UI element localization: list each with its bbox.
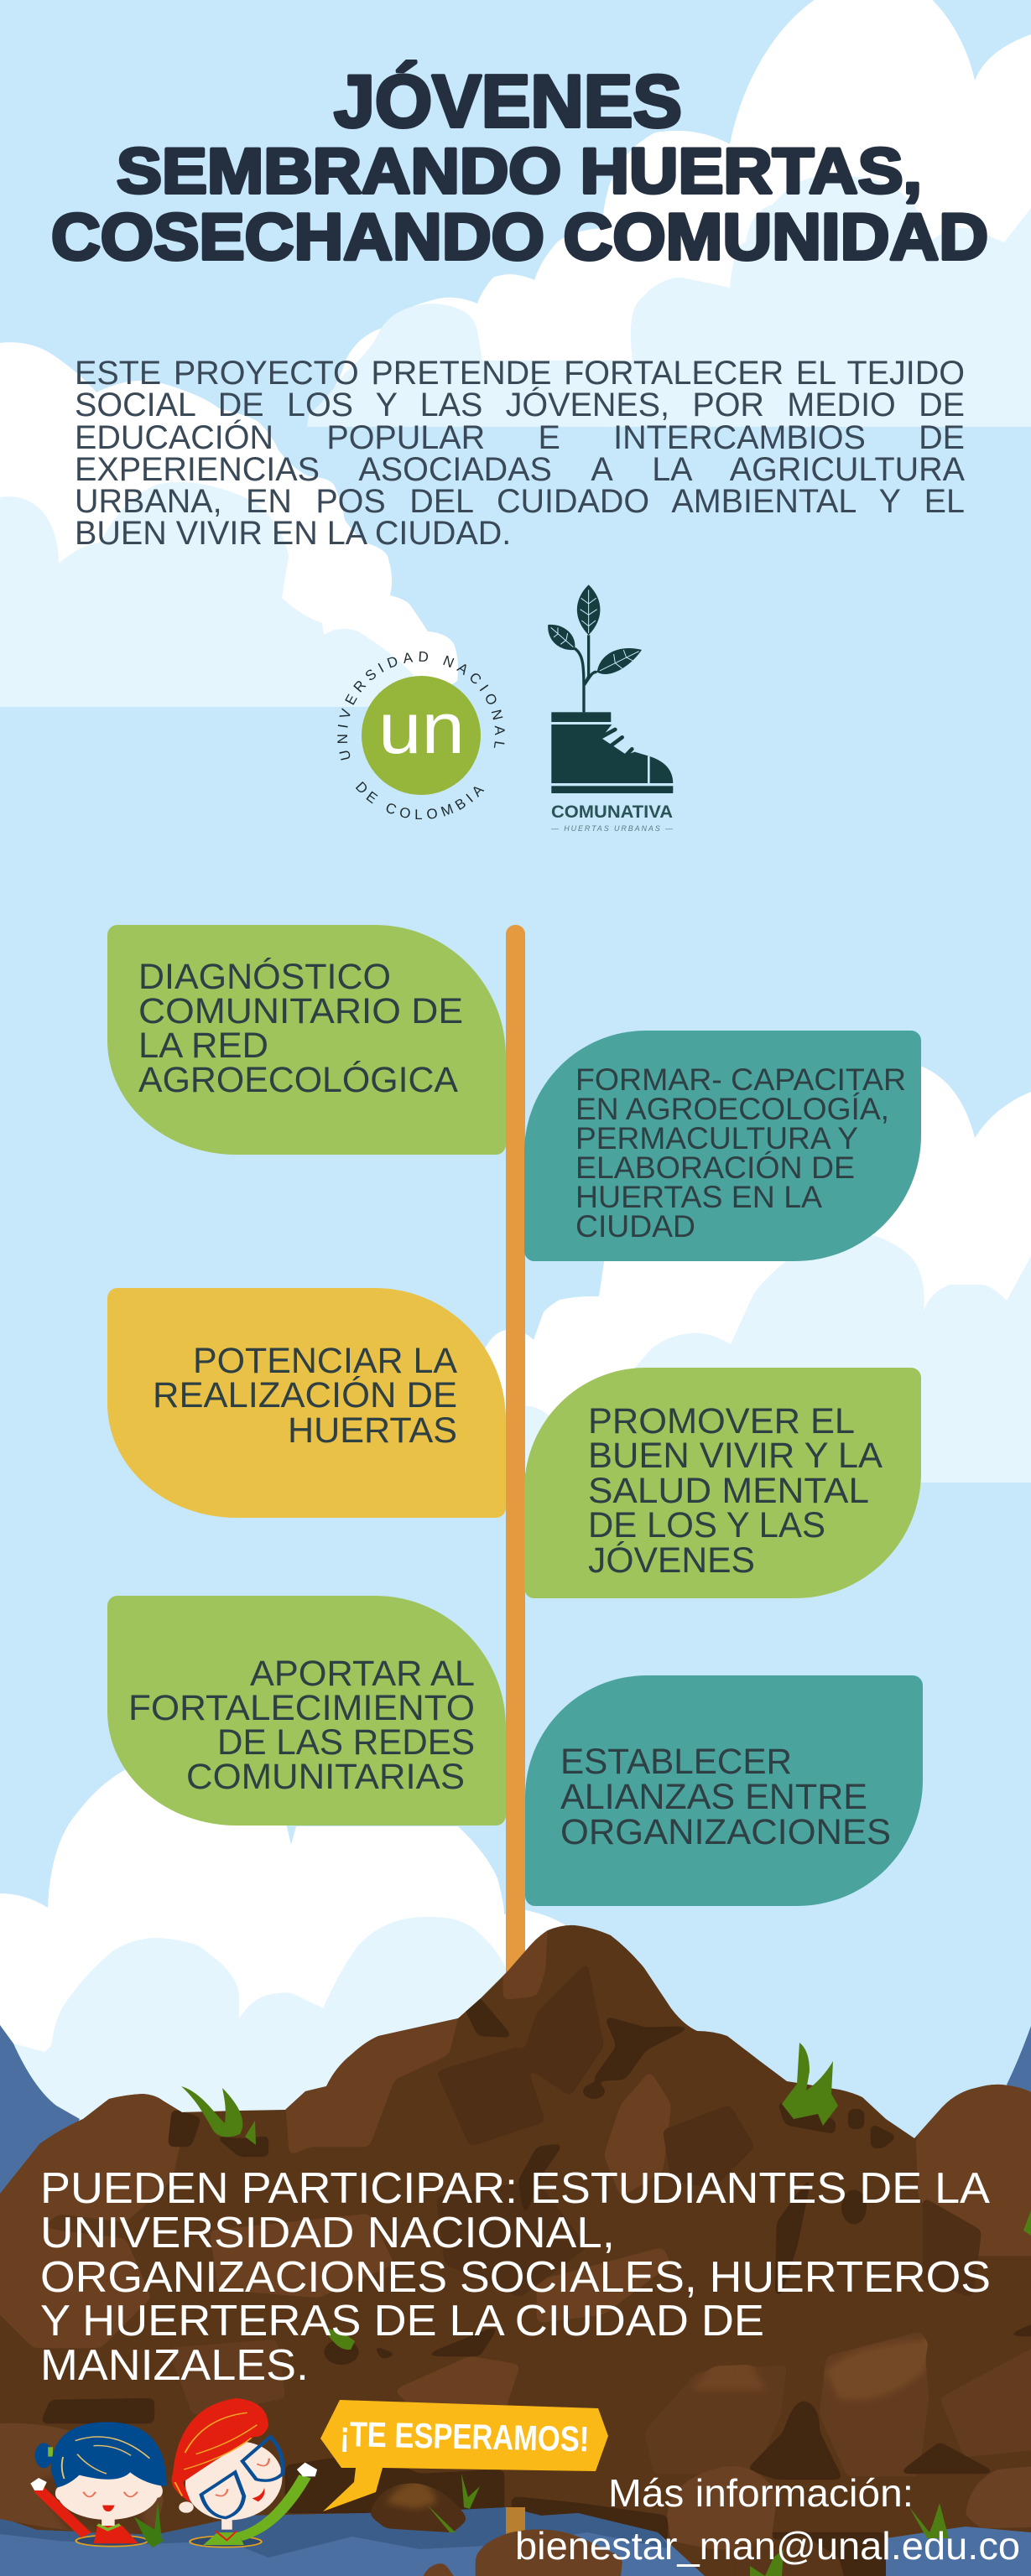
panel: establecer: ESTABLECER xyxy=(560,1742,792,1782)
contact information xyxy=(515,2471,1020,2568)
call to participate xyxy=(40,2164,991,2390)
logo: Comunativa boot with plant xyxy=(548,584,674,833)
title: COSECHANDO COMUNIDAD xyxy=(51,200,988,273)
call to participate: ORGANIZACIONES SOCIALES, HUERTEROS xyxy=(40,2253,991,2302)
intro paragraph: SOCIAL DE LOS Y LAS JÓVENES, POR MEDIO DE xyxy=(75,387,965,423)
title: SEMBRANDO HUERTAS, xyxy=(117,136,922,207)
grass tufts xyxy=(181,2043,1031,2576)
intro paragraph xyxy=(75,355,965,552)
water xyxy=(0,2507,705,2576)
rocks in the water xyxy=(0,2423,1031,2576)
panel: diagnóstico: AGROECOLÓGICA xyxy=(138,1060,458,1100)
child: blue hair xyxy=(30,2422,167,2547)
panel: formar y capacitar xyxy=(524,1031,921,1261)
speech bubble: te esperamos xyxy=(320,2400,608,2511)
panel: promover: PROMOVER EL xyxy=(588,1401,855,1441)
panel: aportar: DE LAS REDES xyxy=(217,1722,475,1763)
title: JÓVENES xyxy=(334,60,682,143)
call to participate: Y HUERTERAS DE LA CIUDAD DE xyxy=(40,2297,764,2345)
panel: promover xyxy=(524,1368,921,1598)
cloud: left xyxy=(0,342,458,707)
call to participate: UNIVERSIDAD NACIONAL, xyxy=(40,2209,615,2257)
panel: aportar xyxy=(107,1596,506,1826)
logo: Comunativa boot with plant: — HUERTAS URBANAS — xyxy=(550,824,674,833)
title xyxy=(51,60,988,273)
panel: promover: JÓVENES xyxy=(588,1540,755,1581)
logo: Universidad Nacional de Colombia xyxy=(337,651,505,819)
brown mountain xyxy=(0,1916,1031,2576)
call to participate: MANIZALES. xyxy=(40,2341,309,2390)
dark crevices xyxy=(40,1996,1031,2576)
orange stem xyxy=(506,925,525,2032)
panel: diagnóstico xyxy=(107,925,506,1155)
logo: Universidad Nacional de Colombia: DE COLOMBIA xyxy=(356,782,485,819)
panel: potenciar xyxy=(107,1288,506,1518)
logo: Universidad Nacional de Colombia: UNIVERSIDAD NACIONAL xyxy=(337,651,505,761)
panel: diagnóstico: DIAGNÓSTICO xyxy=(138,957,391,997)
intro paragraph: EXPERIENCIAS ASOCIADAS A LA AGRICULTURA xyxy=(75,451,965,488)
cloud: bottom left xyxy=(0,1768,570,2180)
panel: potenciar: REALIZACIÓN DE xyxy=(153,1375,457,1415)
panel: promover: DE LOS Y LAS xyxy=(588,1505,825,1545)
panel: establecer: ALIANZAS ENTRE xyxy=(560,1777,867,1817)
panel: formar y capacitar: EN AGROECOLOGÍA, xyxy=(575,1092,889,1126)
panel: aportar: COMUNITARIAS xyxy=(186,1757,465,1797)
panel: aportar: FORTALECIMIENTO xyxy=(128,1688,475,1728)
characters: two children in the water xyxy=(30,2398,317,2547)
panel: formar y capacitar: CIUDAD xyxy=(575,1209,695,1244)
panel: promover: BUEN VIVIR Y LA xyxy=(588,1436,883,1476)
intro paragraph: URBANA, EN POS DEL CUIDADO AMBIENTAL Y EL xyxy=(75,483,965,520)
call to participate: PUEDEN PARTICIPAR: ESTUDIANTES DE LA xyxy=(40,2164,990,2213)
panel: formar y capacitar: FORMAR- CAPACITAR xyxy=(575,1062,906,1097)
panel: potenciar: HUERTAS xyxy=(288,1410,457,1451)
cloud: top right xyxy=(307,0,1031,427)
panel: promover: SALUD MENTAL xyxy=(588,1471,869,1511)
panel: formar y capacitar: HUERTAS EN LA xyxy=(575,1180,822,1214)
panel: diagnóstico: COMUNITARIO DE xyxy=(138,991,463,1031)
panel: formar y capacitar: ELABORACIÓN DE xyxy=(575,1150,855,1185)
logo: Universidad Nacional de Colombia: un xyxy=(378,688,465,769)
panel: potenciar: POTENCIAR LA xyxy=(193,1341,457,1381)
intro paragraph: EDUCACIÓN POPULAR E INTERCAMBIOS DE xyxy=(75,419,965,456)
lower rock masses xyxy=(168,2331,1031,2476)
panel: establecer: ORGANIZACIONES xyxy=(560,1812,891,1852)
intro paragraph: ESTE PROYECTO PRETENDE FORTALECER EL TEJIDO xyxy=(75,355,965,392)
logo: Comunativa boot with plant: COMUNATIVA xyxy=(551,802,673,822)
contact information: Más información: xyxy=(608,2471,914,2515)
speech bubble: te esperamos: ¡TE ESPERAMOS! xyxy=(340,2414,590,2459)
intro paragraph: BUEN VIVIR EN LA CIUDAD. xyxy=(75,515,511,552)
blue background mountains xyxy=(0,2025,1031,2214)
panel: establecer xyxy=(525,1675,923,1906)
contact information: bienestar_man@unal.edu.co xyxy=(515,2524,1020,2568)
child: red hair and glasses xyxy=(172,2398,317,2547)
cloud: middle right xyxy=(478,1048,1031,1483)
orange stem base xyxy=(506,2507,525,2535)
panel: aportar: APORTAR AL xyxy=(250,1654,475,1694)
panel: diagnóstico: LA RED xyxy=(138,1026,268,1066)
panel: formar y capacitar: PERMACULTURA Y xyxy=(575,1121,858,1156)
